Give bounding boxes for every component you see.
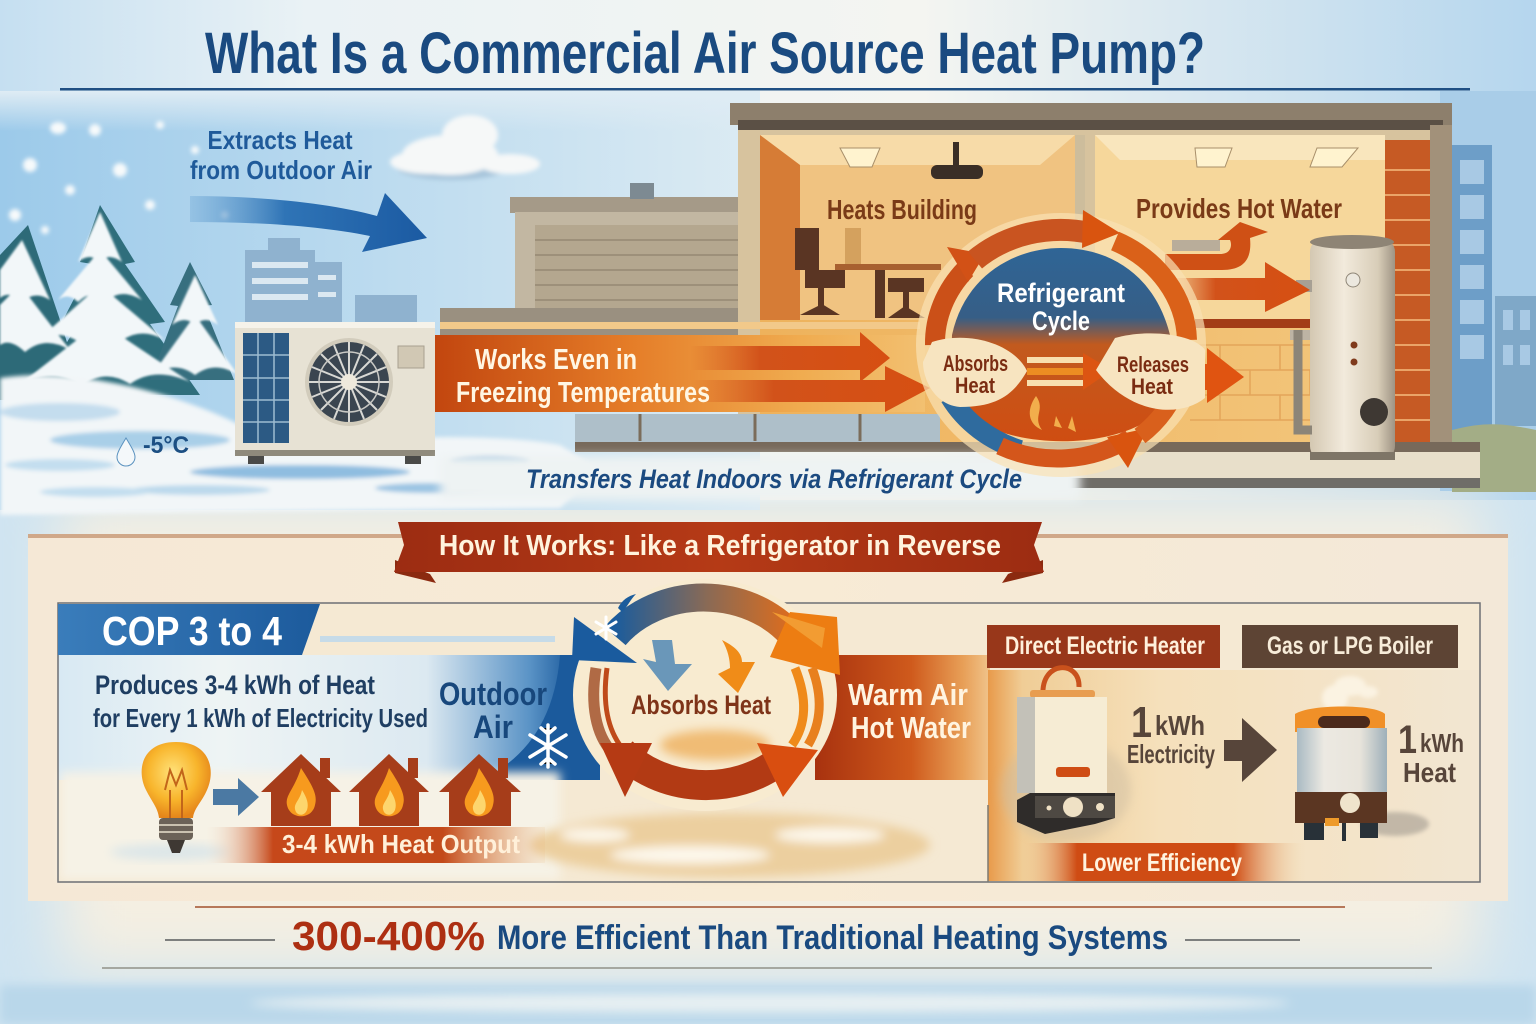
arrow: electricity to heat [1224,718,1277,782]
distant right towers [1452,145,1536,430]
office desk and chairs [795,228,941,318]
absorbs heat bubble: Heat [955,373,996,398]
right sky [1440,91,1536,491]
absorbs heat bubble: Absorbs [943,351,1008,376]
footer lines [102,906,1432,969]
roof [730,103,1452,125]
background city [245,238,417,325]
label: provides hot water: Provides Hot Water [1136,193,1342,224]
brick side wall [1385,140,1430,460]
ribbon heading: How It Works: Like a Refrigerator in Reverse [439,530,1001,562]
room: left office [760,135,1085,325]
centre tube [1027,353,1112,390]
heading: extracts heat: Extracts Heat [208,125,353,155]
caption: transfers heat: Transfers Heat Indoors via Refrigerant Cycle [526,464,1022,494]
outer arc top [975,230,1090,260]
label: refrigerant cycle: Cycle [1032,306,1090,336]
outer right pillar [1430,125,1452,480]
ribbon heading [394,522,1044,583]
footer statistic [292,913,1168,959]
arrow band: works even in freezing temperatures [435,322,930,412]
grass [1452,424,1536,492]
sandy snow [530,813,930,877]
text: 1 kwh heat [1398,718,1464,788]
band: heat output: 3-4 kWh Heat Output [282,829,520,859]
text: 1 kwh electricity: Electricity [1127,739,1215,769]
title underline [60,88,1470,90]
low adjacent building [440,183,750,336]
flames [1030,396,1076,432]
icon: boiler [1295,676,1429,841]
label: outdoor air: Outdoor [439,676,547,712]
top arc blue to orange [615,598,800,646]
house 2 [349,754,429,826]
arrow: blue heat intake [190,193,427,252]
wall [738,130,1440,445]
house 3 [439,754,521,826]
label: refrigerant cycle [997,278,1125,336]
outer arc right [1115,241,1187,340]
refrigerant cycle diagram [916,210,1244,477]
central disc [950,248,1172,441]
right inner arc [792,668,804,745]
inner frame border [58,603,1480,882]
band: lower efficiency [1020,843,1305,881]
cloud [390,115,540,180]
temperature label [117,432,189,466]
heat arrows to hot water [1165,222,1310,328]
band: heat output [205,827,545,863]
label: direct electric heater [987,625,1220,668]
text: produces heat: for Every 1 kWh of Electricity Used [93,703,428,733]
blue snow corner [480,655,600,780]
icon: snowflake small [596,617,616,639]
outer arc left [935,269,966,345]
label: warm air hot water: Hot Water [851,710,971,745]
blue wash [58,655,600,780]
floor strips [575,442,1480,488]
left inner arc [594,668,612,752]
main building [440,103,1536,500]
snowy lower left [60,772,560,880]
arrow: cold down [643,640,692,691]
text: produces heat: Produces 3-4 kWh of Heat [95,670,375,700]
label: gas or lpg boiler [1242,625,1458,668]
arrow: bulb to houses [213,778,259,816]
text: 1 kwh electricity: kWh [1155,710,1205,741]
label: works even: Freezing Temperatures [456,377,710,409]
footer statistic: 300-400% [292,913,485,959]
snow on trees [0,212,238,386]
label: direct electric heater: Direct Electric Heater [1005,632,1205,660]
lower brick wall [760,320,1385,444]
caption backdrop [440,456,1080,500]
text: 1 kwh heat: Heat [1403,757,1456,788]
snow ground [0,375,600,515]
label: outdoor air: Air [473,709,513,745]
hot water tank [1290,235,1395,460]
house 1 [261,754,341,826]
text: 1 kwh heat: kWh [1420,728,1464,758]
text: 1 kwh heat: 1 [1398,718,1417,762]
band: lower efficiency: Lower Efficiency [1082,849,1242,877]
releases heat bubble: Releases [1117,352,1189,377]
room: right utility [1095,135,1385,320]
label: absorbs heat: Absorbs Heat [631,690,771,720]
small divider [987,805,989,882]
footer statistic: More Efficient Than Traditional Heating Systems [497,919,1168,957]
text: 1 kwh electricity [1127,698,1215,769]
label: warm air hot water [848,677,971,745]
blue wisp [618,594,636,612]
text: produces heat [93,670,428,733]
cop banner [58,604,555,655]
outer arc bottom [950,397,1020,450]
label: outdoor air [439,676,547,745]
left arrow head [947,247,985,282]
arrow: release heat [1205,348,1244,403]
arrow: warm down [718,640,755,693]
small band arrows [690,332,890,382]
orange arrow head [770,612,840,675]
heat pump outdoor unit [235,322,435,464]
lower cycle diagram [572,579,840,811]
icon: electric heater [1001,668,1131,842]
title: What Is a Commercial Air Source Heat Pump? [205,21,1205,86]
bottom background wash [0,500,1536,1024]
label: works even [456,344,710,409]
label: refrigerant cycle: Refrigerant [997,278,1125,308]
top arrow head [1082,210,1120,248]
label: warm air hot water: Warm Air [848,677,968,712]
temperature label: -5°C [143,432,189,459]
blue arrow head [572,617,637,663]
releases heat bubble [1096,333,1205,410]
sky top fade [0,91,760,131]
label: works even: Works Even in [475,344,637,376]
bottom arc [622,752,778,785]
icon: light bulb [110,742,230,860]
cop banner: COP 3 to 4 [102,608,282,654]
lower windows [575,414,940,442]
label: gas or lpg boiler: Gas or LPG Boiler [1267,632,1433,660]
text: 1 kwh electricity: 1 [1131,698,1152,747]
heading: extracts heat: from Outdoor Air [190,155,372,185]
fan [305,338,393,426]
label: heats building: Heats Building [827,194,977,225]
heading: extracts heat [190,125,372,185]
panel: how it works [28,534,1508,901]
icons: houses with flames [261,754,521,826]
panel: outdoor winter scene [0,91,1536,515]
sand centre [660,730,770,760]
falling snow [9,121,229,234]
icon: snowflake [530,725,566,767]
ceiling lights [840,148,880,167]
warm band [815,655,990,780]
right wash [988,670,1479,881]
absorbs heat bubble [923,338,1027,407]
inner frame fill [58,603,1480,882]
trees [0,205,238,400]
releases heat bubble: Heat [1131,374,1174,399]
sky [0,91,760,510]
